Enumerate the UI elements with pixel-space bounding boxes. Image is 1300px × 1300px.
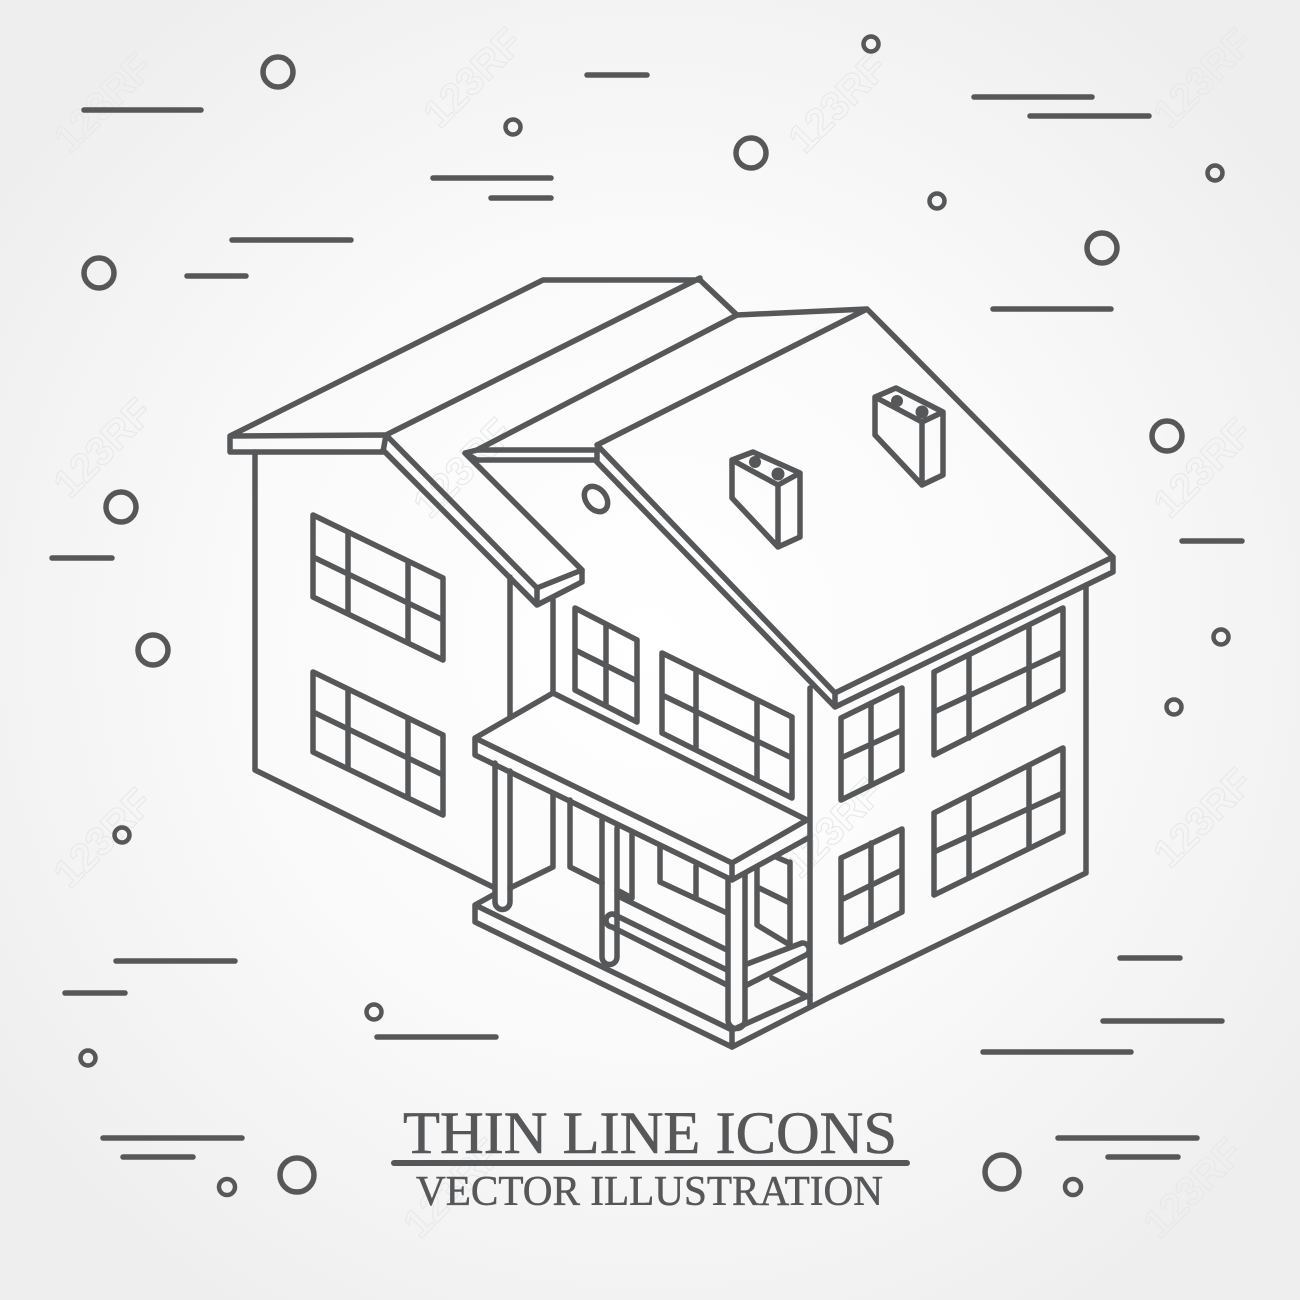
vent oval [580, 482, 612, 516]
main gable roof [465, 309, 1113, 707]
porch door and back wall [510, 793, 727, 950]
watermarks: 123RF [45, 390, 161, 506]
left wing lower window [313, 672, 443, 815]
watermarks: 123RF [395, 1130, 511, 1246]
isometric house [230, 278, 1113, 1047]
porch railing [606, 914, 809, 997]
chimney left [732, 452, 800, 547]
porch posts [495, 763, 745, 1028]
right upper small window [841, 688, 902, 800]
title rule [394, 1160, 907, 1166]
chimney right [875, 388, 943, 485]
porch side window [757, 857, 790, 945]
right lower small window [841, 829, 902, 942]
watermarks: 123RF [45, 780, 161, 896]
middle large window [662, 653, 792, 798]
decorative dashes [52, 75, 1242, 1157]
watermarks: 123RF [780, 45, 896, 161]
decorative small circles [80, 36, 1228, 1195]
left wing roof [230, 278, 737, 605]
watermarks: 123RF [415, 20, 531, 136]
watermarks: 123RF [1135, 1130, 1251, 1246]
right lower large window [934, 748, 1063, 895]
left wing upper window [313, 515, 443, 660]
walls [255, 452, 1086, 1047]
right upper large window [934, 608, 1063, 755]
title: THIN LINE ICONS [403, 1100, 897, 1166]
subtitle: VECTOR ILLUSTRATION [416, 1169, 883, 1215]
decorative large circles [84, 57, 1182, 1192]
watermarks: 123RF [1145, 760, 1261, 876]
porch floor [475, 895, 810, 1047]
porch roof [475, 693, 810, 880]
watermarks: 123RF [775, 770, 891, 886]
watermarks: 123RF [1145, 410, 1261, 526]
watermarks: 123RF [1145, 20, 1261, 136]
watermarks: 123RF [45, 45, 161, 161]
middle small window [575, 608, 637, 722]
watermarks: 123RF [405, 410, 521, 526]
